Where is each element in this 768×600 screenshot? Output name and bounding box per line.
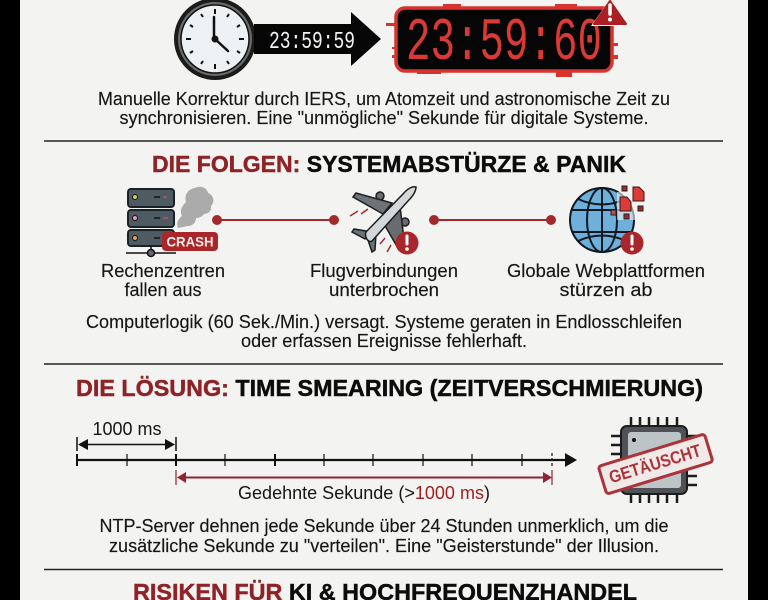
label: Globale Webplattformen stürzen ab	[507, 261, 705, 300]
icon: crashed server	[126, 187, 213, 256]
label: Globale Webplattformen stürzen ab: Globale Webplattformen	[507, 261, 705, 281]
dimension: 1000 ms: 1000 ms	[92, 419, 162, 439]
stamp: GETÄUSCHT: GETÄUSCHT	[607, 440, 704, 487]
heading: Die Lösung: DIE LÖSUNG: TIME SMEARING (ZEITVERSCHMIERUNG)	[76, 375, 703, 401]
icon: fragmenting globe with warning	[570, 186, 644, 254]
icon: analog clock	[174, 0, 256, 80]
icon: deceived chip	[611, 417, 697, 503]
text block: leap second explanation	[98, 89, 670, 128]
label: Rechenzentren fallen aus	[101, 261, 225, 300]
arrow: 23:59:59 to 23:59:60: 23:59:59	[269, 29, 355, 56]
label: Flugverbindungen unterbrochen: unterbrochen	[329, 280, 439, 300]
label: Globale Webplattformen stürzen ab: stürzen ab	[560, 280, 652, 300]
icon: warning triangle	[591, 0, 628, 26]
icon: airplane with warning	[350, 187, 418, 254]
dimension: stretched second	[176, 470, 552, 485]
arrow: 23:59:59 to 23:59:60	[254, 12, 381, 66]
connector: plane to globe	[429, 215, 556, 225]
label: stretched second: Gedehnte Sekunde (>1000 ms)	[238, 483, 490, 503]
label: Rechenzentren fallen aus: Rechenzentren	[101, 261, 225, 281]
text block: computer logic: oder erfassen Ereignisse fehlerhaft.	[241, 331, 527, 351]
timeline axis	[77, 453, 577, 467]
badge: CRASH: CRASH	[166, 234, 214, 250]
text block: NTP servers: zusätzliche Sekunde zu "verteilen". Eine "Geisterstunde" der Illusion.	[109, 536, 659, 556]
heading: Die Folgen: DIE FOLGEN: SYSTEMABSTÜRZE & PANIK	[152, 151, 626, 177]
connector: server to plane	[212, 215, 339, 225]
text block: leap second explanation: synchronisieren. Eine "unmögliche" Sekunde für digitale Systeme.	[120, 108, 648, 128]
timeline diagram	[77, 419, 577, 503]
digital display: 23:59:60: 23:59:60	[406, 10, 602, 78]
dimension: 1000 ms	[77, 419, 176, 451]
text block: computer logic: Computerlogik (60 Sek./Min.) versagt. Systeme geraten in Endlosschleifen	[86, 312, 682, 332]
text block: NTP servers	[100, 516, 668, 556]
text block: leap second explanation: Manuelle Korrektur durch IERS, um Atomzeit und astronomische Zeit zu	[98, 89, 670, 109]
label: Rechenzentren fallen aus: fallen aus	[124, 280, 202, 300]
text block: NTP servers: NTP-Server dehnen jede Sekunde über 24 Stunden unmerklich, um die	[100, 516, 668, 536]
label: Flugverbindungen unterbrochen	[310, 261, 458, 300]
digital display: 23:59:60	[386, 4, 618, 78]
text block: computer logic	[86, 312, 682, 351]
label: Flugverbindungen unterbrochen: Flugverbindungen	[310, 261, 458, 281]
